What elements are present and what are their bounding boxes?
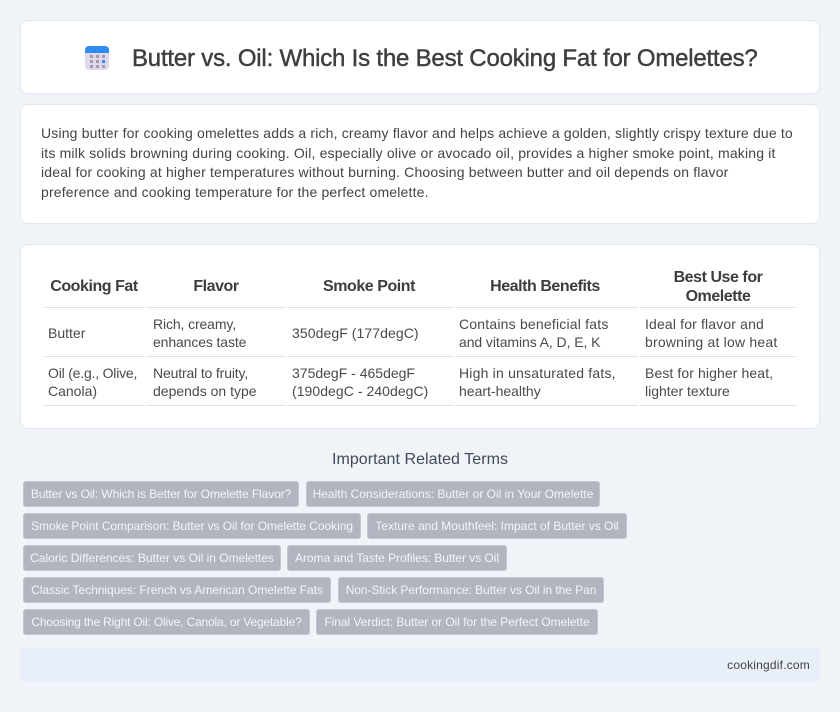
tag: Choosing the Right Oil: Olive, Canola, or Vegetable?: [31, 615, 302, 629]
row: oil: (190degC - 240degC): [292, 383, 428, 399]
comparison table: [43, 269, 797, 406]
row: butter: 350degF (177degC): [292, 325, 419, 341]
row: oil: Oil (e.g., Olive,: [48, 365, 137, 381]
tag: [23, 481, 299, 507]
related terms heading: Important Related Terms: [332, 451, 508, 468]
intro panel: [20, 104, 820, 224]
related terms tags: [23, 481, 627, 635]
tag: [338, 577, 604, 603]
intro text: ideal for cooking at higher temperatures without burning. Choosing between butter and oil depends on flavor: [41, 164, 729, 180]
tag: [287, 545, 507, 571]
intro text: [41, 125, 793, 200]
row: oil: Best for higher heat,: [645, 365, 773, 381]
row: butter: Rich, creamy,: [153, 316, 236, 332]
tag: Caloric Differences: Butter vs Oil in Omelettes: [30, 551, 274, 565]
tag: Classic Techniques: French vs American Omelette Fats: [31, 583, 323, 597]
row: butter: [48, 316, 778, 350]
tag: [23, 545, 281, 571]
title: Butter vs. Oil: Which Is the Best Cooking Fat for Omelettes?: [132, 45, 758, 72]
row: butter: browning at low heat: [645, 334, 777, 350]
row: butter: Contains beneficial fats: [459, 316, 609, 332]
table header: Flavor: [193, 278, 239, 295]
table header: Best Use for: [674, 269, 762, 286]
table header: Health Benefits: [490, 278, 600, 295]
tag: Final Verdict: Butter or Oil for the Perfect Omelette: [324, 615, 590, 629]
tag: [23, 609, 310, 635]
table header: Smoke Point: [323, 278, 415, 295]
row: oil: High in unsaturated fats,: [459, 365, 616, 381]
icon: calendar: [85, 46, 109, 70]
row: oil: [48, 365, 773, 399]
tag: [367, 513, 627, 539]
intro text: Using butter for cooking omelettes adds a rich, creamy flavor and helps achieve a golden, slightly crispy texture due to: [41, 125, 793, 141]
tag: Health Considerations: Butter or Oil in Your Omelette: [313, 487, 593, 501]
tag: [23, 577, 331, 603]
table header: Omelette: [686, 288, 750, 305]
tag: Non-Stick Performance: Butter vs Oil in the Pan: [346, 583, 596, 597]
row: butter: Butter: [48, 325, 85, 341]
tag: Butter vs Oil: Which is Better for Omelette Flavor?: [31, 487, 291, 501]
footer: [20, 648, 820, 682]
intro text: its milk solids browning during cooking. Oil, especially olive or avocado oil, provides a higher smoke point, making it: [41, 145, 776, 161]
header panel: [20, 20, 820, 94]
source: cookingdif.com: [727, 658, 810, 672]
row: oil: 375degF - 465degF: [292, 365, 415, 381]
row: oil: depends on type: [153, 383, 257, 399]
row: oil: heart-healthy: [459, 383, 541, 399]
row: butter: and vitamins A, D, E, K: [459, 334, 600, 350]
row: butter: Ideal for flavor and: [645, 316, 764, 332]
row: butter: enhances taste: [153, 334, 246, 350]
tag: Texture and Mouthfeel: Impact of Butter vs Oil: [375, 519, 619, 533]
table panel: [20, 244, 820, 429]
intro text: preference and cooking temperature for the perfect omelette.: [41, 184, 429, 200]
table header: [50, 269, 763, 305]
tag: [23, 513, 361, 539]
tag: [316, 609, 598, 635]
row: oil: Neutral to fruity,: [153, 365, 248, 381]
row: oil: lighter texture: [645, 383, 730, 399]
tag: Aroma and Taste Profiles: Butter vs Oil: [295, 551, 499, 565]
row: oil: Canola): [48, 383, 97, 399]
tag: Smoke Point Comparison: Butter vs Oil for Omelette Cooking: [31, 519, 353, 533]
tag: [306, 481, 600, 507]
table header: Cooking Fat: [50, 278, 138, 295]
